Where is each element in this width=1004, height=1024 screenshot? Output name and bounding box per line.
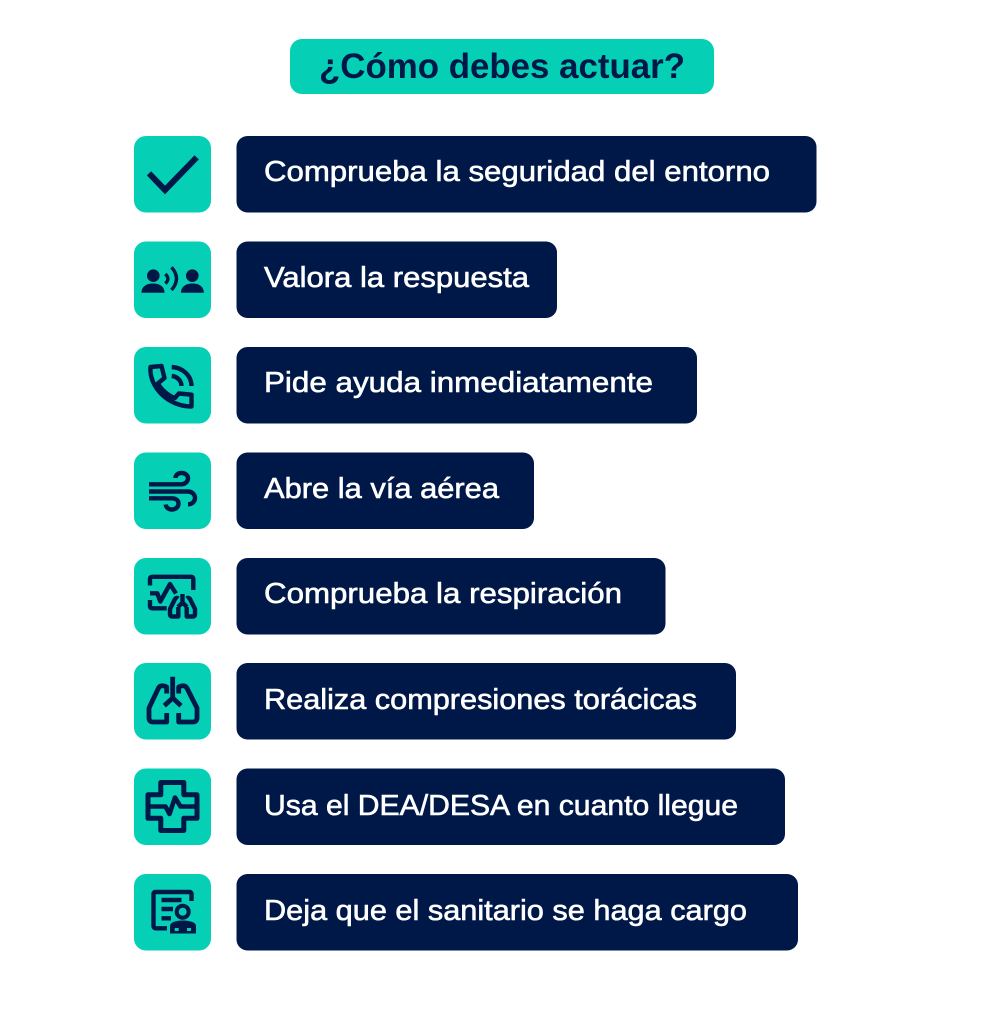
label bar 3: Pide ayuda inmediatamente — [264, 367, 653, 399]
label bar 5: Comprueba la respiración — [264, 578, 622, 610]
icon: phone call — [134, 347, 211, 424]
label bar 5 — [236, 558, 666, 634]
label bar 4: Abre la vía aérea — [264, 473, 500, 505]
label bar 2 — [236, 242, 557, 318]
icon: monitor with lungs — [134, 558, 211, 634]
step 1: comprueba la seguridad — [134, 136, 816, 212]
label bar 3 — [236, 347, 697, 424]
label bar 1: Comprueba la seguridad del entorno — [264, 156, 770, 188]
step 8: deja que el sanitario — [134, 874, 798, 950]
label bar 7 — [236, 768, 785, 845]
label bar 2: Valora la respuesta — [264, 262, 530, 294]
step 4: abre la via aerea — [134, 452, 534, 529]
icon: checkmark — [134, 136, 211, 212]
title: ¿Cómo debes actuar? — [319, 47, 685, 86]
label bar 6 — [236, 663, 736, 740]
step 6: compresiones toracicas — [134, 663, 736, 740]
step 3: pide ayuda — [134, 347, 697, 424]
step 2: valora la respuesta — [134, 242, 557, 318]
icon: medical record with person — [134, 874, 211, 950]
icon: two people and sound waves — [134, 242, 211, 318]
title — [290, 39, 714, 94]
step 7: usa el DEA — [134, 768, 785, 845]
label bar 8: Deja que el sanitario se haga cargo — [264, 895, 747, 927]
icon: medical cross with pulse — [134, 768, 211, 845]
label bar 4 — [236, 452, 534, 529]
icon detail: person body — [170, 920, 196, 934]
icon: lungs — [134, 663, 211, 740]
icon: wind — [134, 452, 211, 529]
step 5: comprueba la respiracion — [134, 558, 666, 634]
label bar 8 — [236, 874, 798, 950]
label bar 6: Realiza compresiones torácicas — [264, 684, 697, 716]
label bar 1 — [236, 136, 816, 212]
label bar 7: Usa el DEA/DESA en cuanto llegue — [264, 790, 738, 822]
